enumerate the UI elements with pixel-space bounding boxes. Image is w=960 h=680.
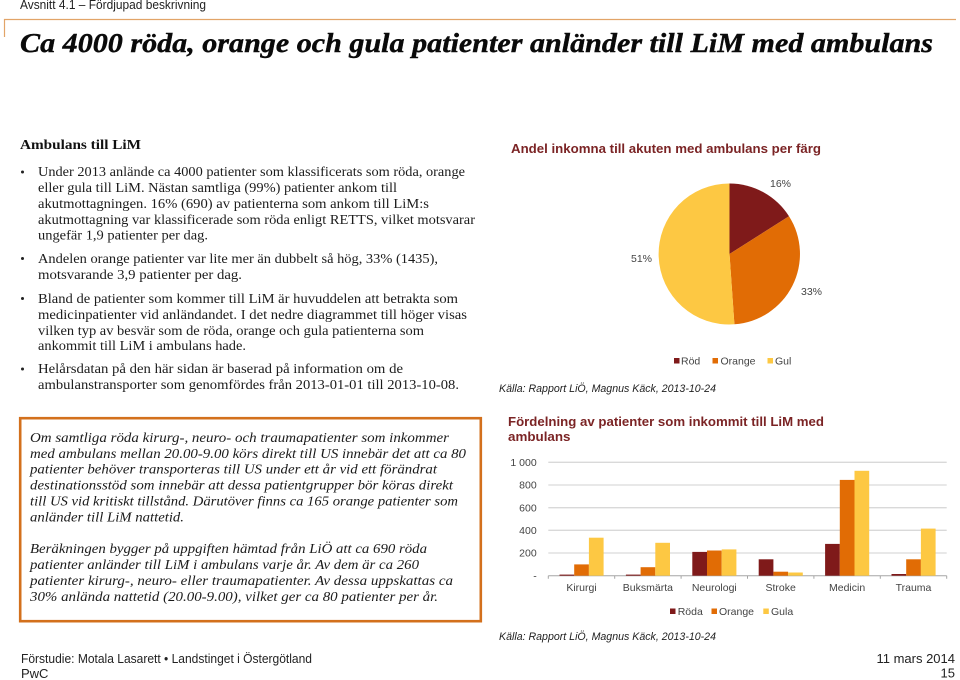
category labels: Medicin xyxy=(829,582,865,594)
bar legend: Gula xyxy=(771,606,793,618)
y axis labels: 800 xyxy=(519,480,537,492)
bar chart panel xyxy=(499,414,947,643)
bar legend: Röda xyxy=(678,606,703,618)
callout paragraph 1: Om samtliga röda kirurg-, neuro- och traumapatienter som inkommer xyxy=(30,431,450,446)
callout box xyxy=(20,418,481,621)
callout paragraph 2: Beräkningen bygger på uppgiften hämtad från LiÖ att ca 690 röda xyxy=(30,540,427,557)
bars: Stroke xyxy=(759,559,803,576)
bullet 3: medicinpatienter vid anländandet. I det nedre diagrammet till höger visas xyxy=(38,308,467,323)
y axis labels: 200 xyxy=(519,548,537,560)
bullet 3: ankommit till LiM i ambulans hade. xyxy=(38,339,246,354)
pie labels xyxy=(631,178,822,298)
callout paragraph 2: 30% anlända nattetid (20.00-9.00), vilket ger ca 80 patienter per år. xyxy=(29,590,438,605)
y axis labels: 600 xyxy=(519,502,537,514)
pie legend: Gul xyxy=(775,356,791,368)
callout paragraph 2: patienter kirurg-, neuro- eller traumapatienter. Av dessa uppskattas ca xyxy=(29,574,453,589)
bullet 4: ambulanstransporter som genomfördes från 2013-01-01 till 2013-10-08. xyxy=(38,378,459,393)
category labels: Kirurgi xyxy=(566,582,597,594)
pie labels: 33% xyxy=(801,286,822,298)
pie source: Källa: Rapport LiÖ, Magnus Käck, 2013-10-24 xyxy=(499,383,716,395)
category labels xyxy=(566,582,932,594)
callout paragraph 1 xyxy=(29,431,466,526)
bar source: Källa: Rapport LiÖ, Magnus Käck, 2013-10-24 xyxy=(499,631,716,643)
pie legend: Orange xyxy=(720,356,756,368)
bullet 4 xyxy=(21,362,459,393)
pie labels: 16% xyxy=(770,178,791,190)
bars: Buksmärta xyxy=(626,543,670,576)
panel: ambulance text xyxy=(20,138,475,393)
bullet 1: akutmottagning var klassificerade som röda enligt RETTS, vilket motsvarar xyxy=(38,213,475,228)
pie chart title: Andel inkomna till akuten med ambulans per färg xyxy=(511,141,821,156)
footer right xyxy=(876,651,955,680)
bars: Medicin xyxy=(825,471,869,576)
bullet 1: akutmottagningen. 16% (690) av patienterna som ankom till LiM:s xyxy=(38,197,429,212)
footer left xyxy=(21,651,312,680)
bullet 1 xyxy=(21,165,475,244)
bar legend xyxy=(670,606,793,618)
bar chart title xyxy=(508,414,824,444)
bullet 1: ungefär 1,9 patienter per dag. xyxy=(38,228,208,244)
bullet 2: motsvarande 3,9 patienter per dag. xyxy=(38,268,242,283)
pie legend xyxy=(674,356,791,368)
pie labels: 51% xyxy=(631,253,652,265)
bullet 3 xyxy=(21,292,467,354)
bullet 3: Bland de patienter som kommer till LiM är huvuddelen att betrakta som xyxy=(38,292,458,307)
callout paragraph 2 xyxy=(29,540,453,605)
callout paragraph 1: destinationsstöd som innebär att dessa patientgrupper bör köras direkt xyxy=(30,478,454,494)
bullet 4: Helårsdatan på den här sidan är baserad på information om de xyxy=(38,362,403,377)
title rule xyxy=(4,20,956,37)
pie chart panel xyxy=(499,141,822,395)
category labels: Trauma xyxy=(896,582,932,594)
title: Ca 4000 röda, orange och gula patienter anländer till LiM med ambulans xyxy=(20,28,933,58)
category labels: Buksmärta xyxy=(623,582,673,594)
bar legend: Orange xyxy=(719,606,754,618)
bullet 3: vilken typ av besvär som de röda, orange och gula patienterna som xyxy=(38,324,424,339)
y axis labels xyxy=(510,457,537,582)
bar chart title: ambulans xyxy=(508,429,570,444)
category labels: Neurologi xyxy=(692,582,737,594)
bullet 2: Andelen orange patienter var lite mer än dubbelt så hög, 33% (1435), xyxy=(38,252,438,267)
bars: Trauma xyxy=(892,529,936,576)
callout paragraph 1: patienter behöver transporteras till US under ett år vid ett förändrat xyxy=(29,462,438,478)
bars: Kirurgi xyxy=(560,538,604,576)
y axis labels: - xyxy=(533,570,537,582)
bullet 1: Under 2013 anlände ca 4000 patienter som klassificerats som röda, orange xyxy=(38,165,465,180)
pie legend: Röd xyxy=(681,356,700,368)
category labels: Stroke xyxy=(766,582,796,594)
callout paragraph 1: anländer till LiM nattetid. xyxy=(30,510,184,526)
bullet 1: eller gula till LiM. Nästan samtliga (99%) patienter ankom till xyxy=(38,181,397,196)
bars: Neurologi xyxy=(692,549,736,576)
pie chart xyxy=(659,183,800,324)
footer left: Förstudie: Motala Lasarett • Landstinget i Östergötland xyxy=(21,651,312,666)
bullet 2 xyxy=(21,252,438,283)
callout paragraph 1: till US vid kritiskt tillstånd. Därutöver finns ca 165 orange patienter som xyxy=(30,494,458,510)
footer right: 11 mars 2014 xyxy=(876,651,955,666)
callout paragraph 1: med ambulans mellan 20.00-9.00 körs direkt till US innebär det att ca 80 xyxy=(30,447,466,462)
panel heading: Ambulans till LiM xyxy=(20,138,141,153)
callout paragraph 2: patienter anländer till LiM i ambulans varje år. Av dem är ca 260 xyxy=(29,558,419,573)
y axis labels: 1 000 xyxy=(510,457,537,469)
bar chart title: Fördelning av patienter som inkommit till LiM med xyxy=(508,414,824,429)
y axis labels: 400 xyxy=(519,525,537,537)
